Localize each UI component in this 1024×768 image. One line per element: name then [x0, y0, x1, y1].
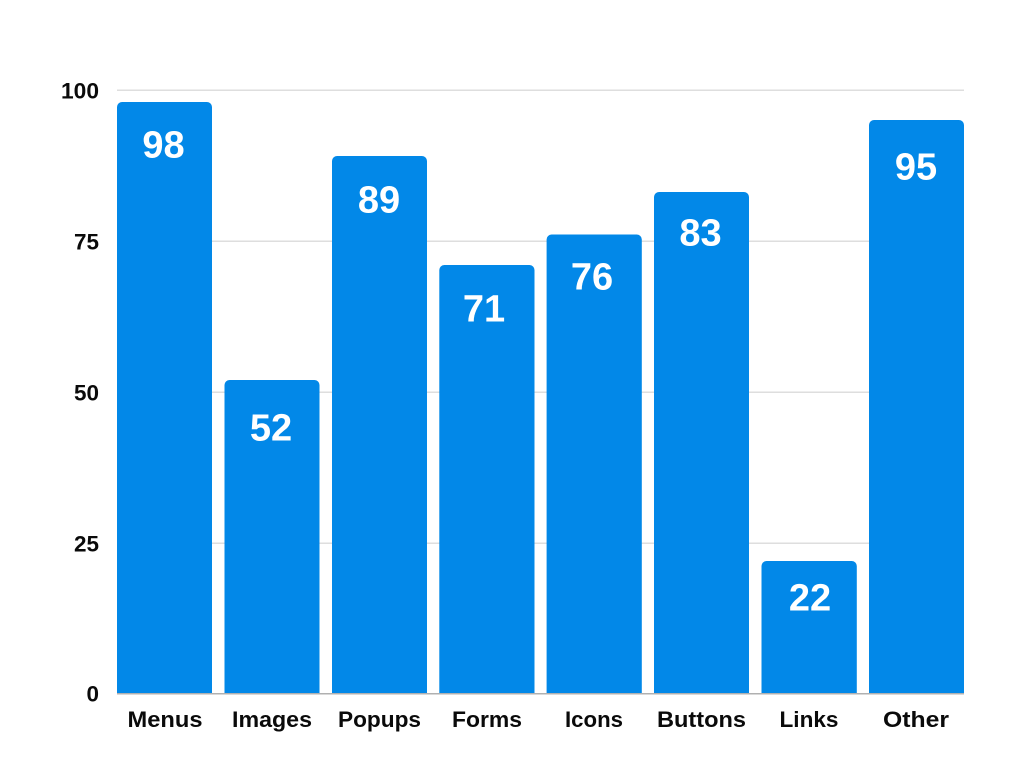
category labels: Links: [780, 707, 838, 732]
category labels: [128, 707, 949, 732]
y axis labels: 0: [86, 682, 99, 706]
category labels: Other: [883, 707, 949, 732]
y axis labels: 50: [74, 380, 99, 406]
y axis labels: 100: [61, 78, 99, 104]
value labels: 22: [789, 578, 831, 620]
category labels: Popups: [338, 707, 421, 732]
category labels: Forms: [452, 707, 522, 732]
value labels: 98: [142, 124, 185, 166]
category labels: Menus: [128, 707, 202, 732]
value labels: 71: [463, 288, 505, 330]
category labels: Buttons: [657, 707, 746, 732]
value labels: 95: [895, 146, 937, 188]
value labels: 52: [250, 408, 292, 450]
category labels: Images: [232, 707, 312, 732]
value labels: 76: [571, 256, 613, 298]
category labels: Icons: [565, 707, 623, 732]
value labels: 89: [358, 180, 400, 222]
value labels: [142, 124, 937, 620]
value labels: 83: [679, 212, 722, 254]
bars: [117, 102, 964, 694]
y axis labels: 75: [74, 230, 99, 254]
y axis labels: [61, 78, 99, 706]
y axis labels: 25: [74, 532, 99, 556]
